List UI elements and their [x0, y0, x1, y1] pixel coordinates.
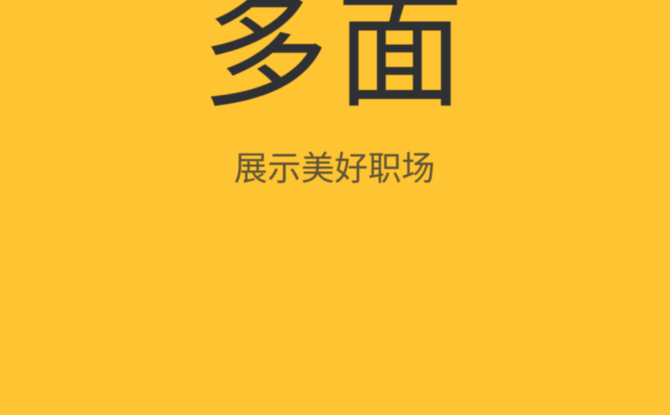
subtitle: 展示美好职场 — [234, 141, 435, 190]
